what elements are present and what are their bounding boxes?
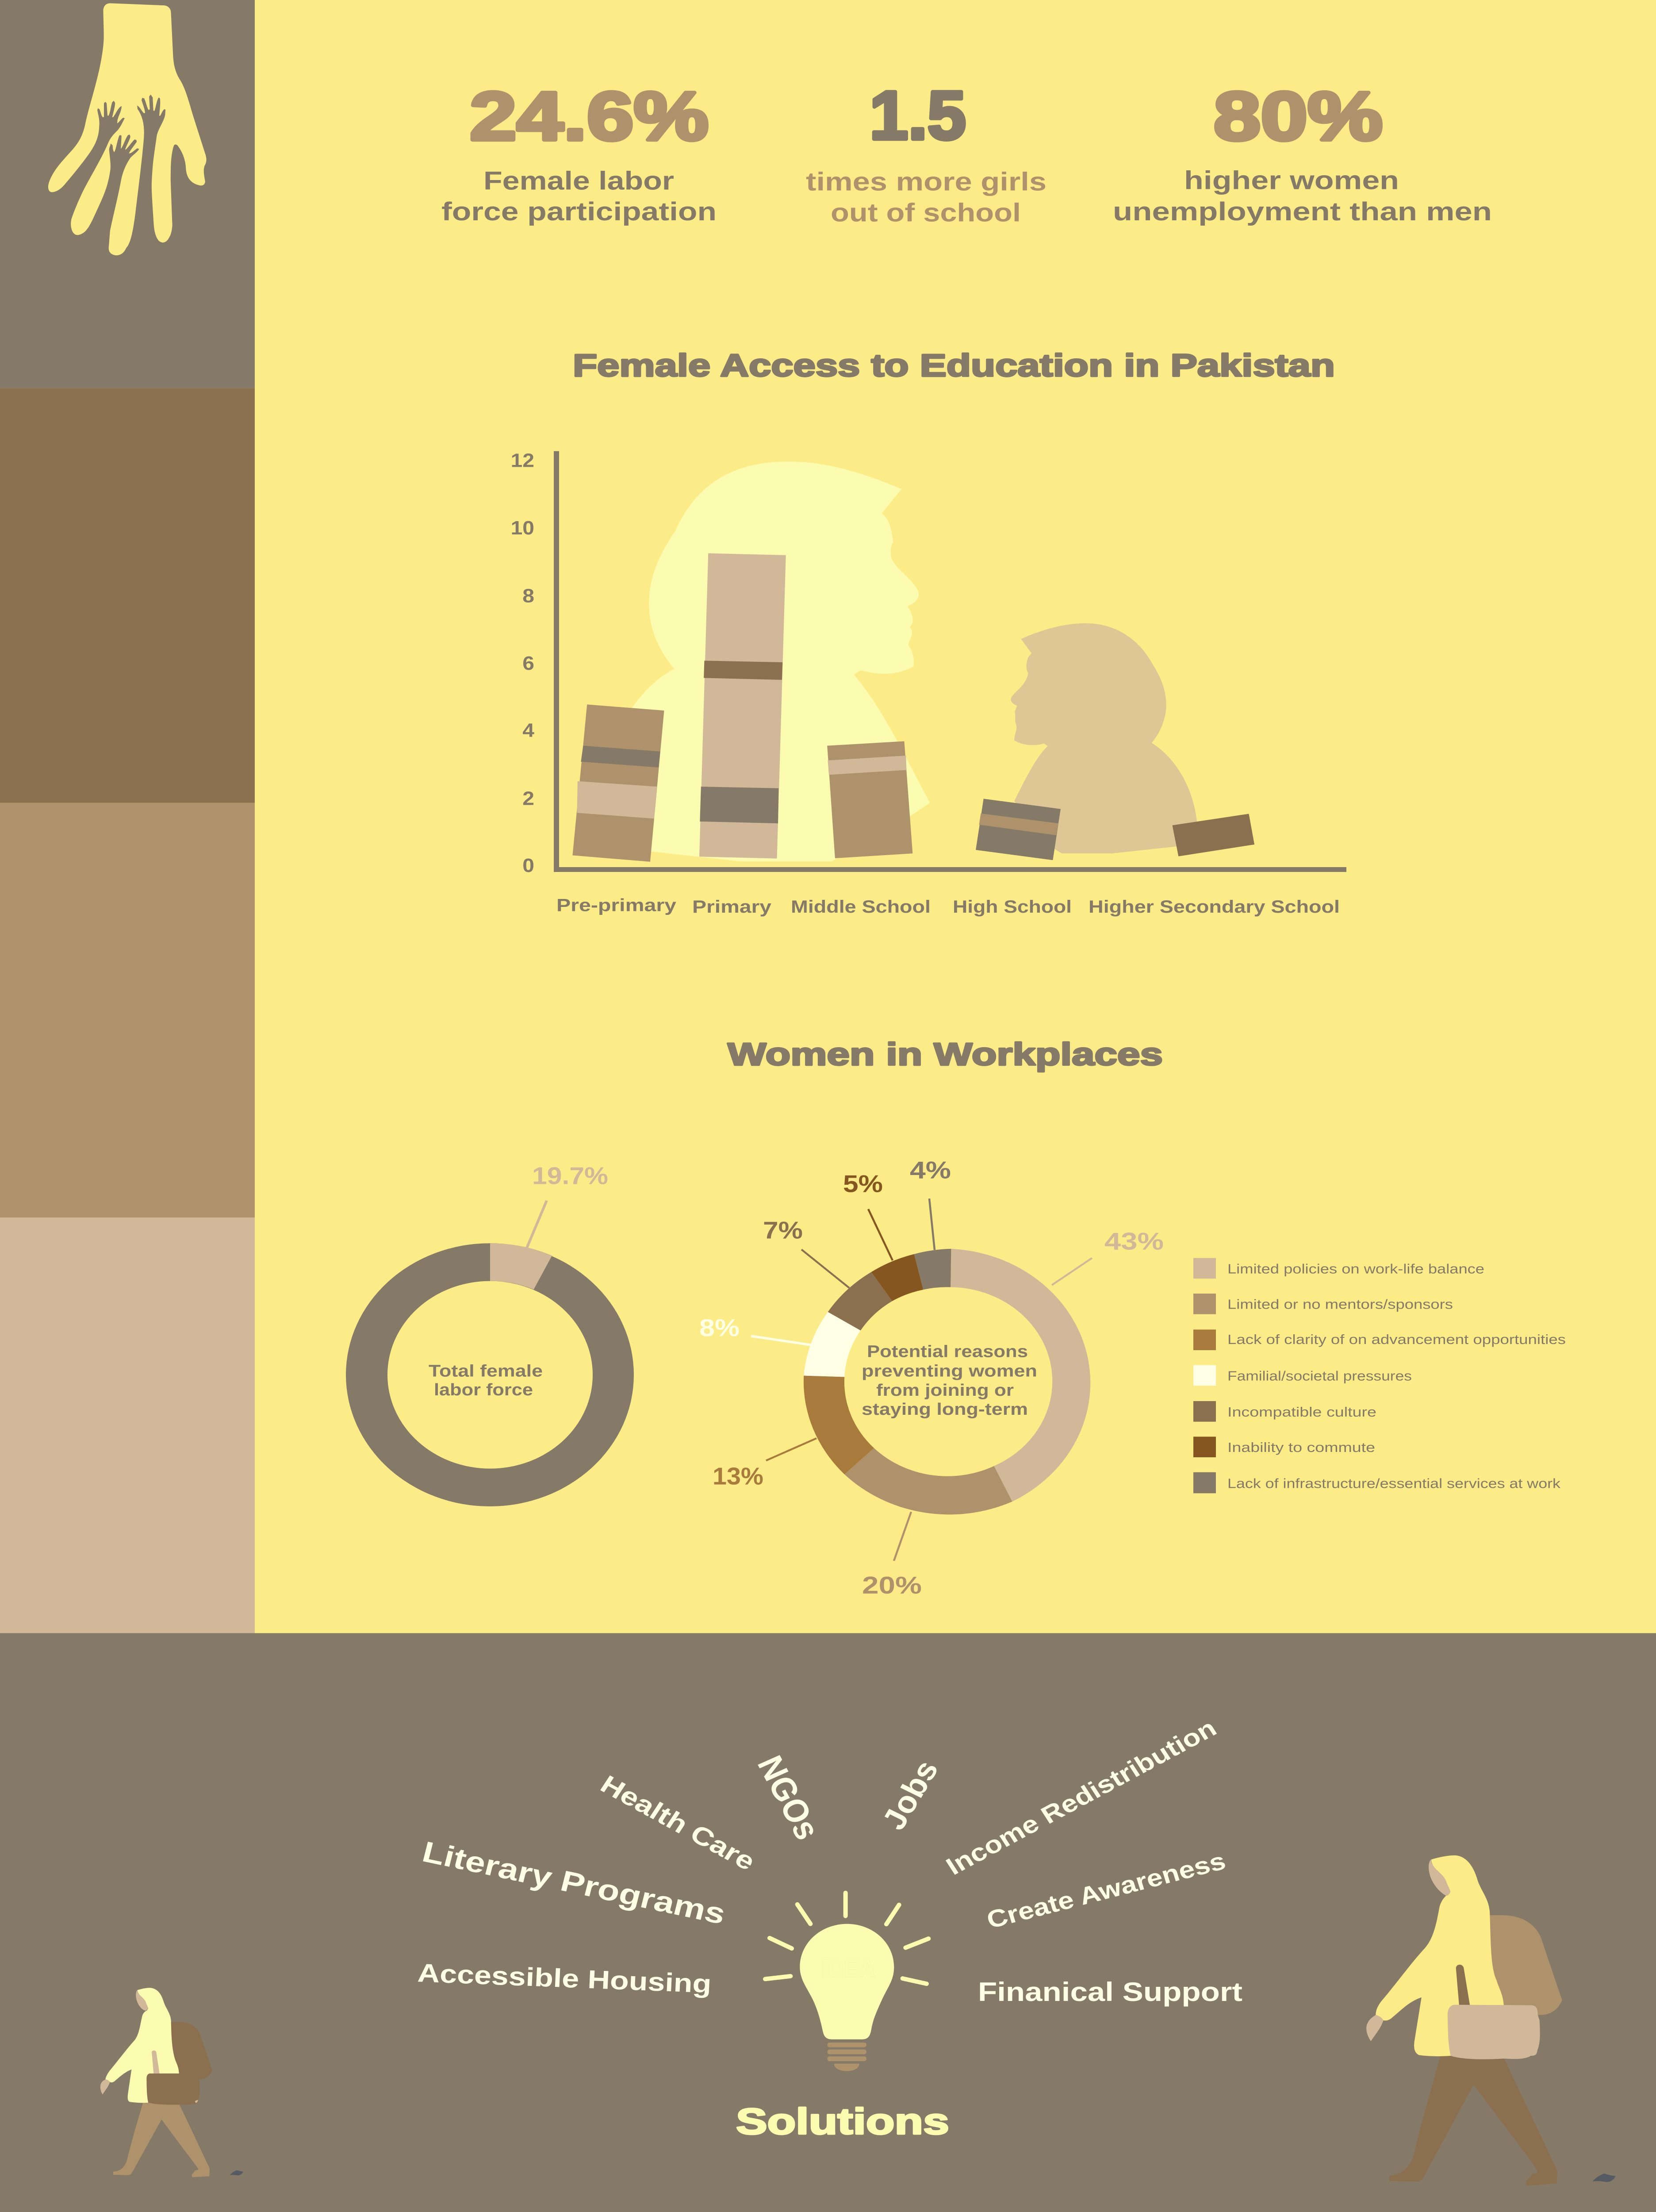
stat: 80% higher women unemployment: higher women <box>1184 166 1399 195</box>
illustration: large woman silhouette <box>598 461 930 861</box>
stat: 1.5 times more girls out of school: times more girls <box>806 167 1046 196</box>
center text: total female labor force <box>429 1361 543 1399</box>
donut slice: 19.7% <box>490 1244 552 1290</box>
y axis labels <box>511 449 534 876</box>
bar: High School <box>976 799 1061 860</box>
legend: potential reasons: Incompatible culture <box>1227 1404 1376 1419</box>
legend: potential reasons <box>1193 1258 1566 1493</box>
bulb screw base <box>828 2043 866 2071</box>
chart: potential reasons donut <box>699 1157 1164 1599</box>
x axis labels: Pre-primary <box>556 895 677 915</box>
heading: Solutions: Solutions <box>736 2101 949 2142</box>
bar: Higher Secondary School <box>1172 814 1254 856</box>
bar: Middle School <box>827 741 912 858</box>
bar: Pre-primary <box>572 704 664 862</box>
x axis labels: High School <box>953 897 1072 917</box>
illustration: small walking girl with backpack <box>100 1988 243 2177</box>
y axis labels: 8 <box>522 584 534 607</box>
bulb rays <box>765 1893 928 1984</box>
legend: potential reasons: Lack of infrastructure/essential services at work <box>1227 1476 1560 1491</box>
percentage labels: 7% <box>763 1217 803 1244</box>
x axis labels: Higher Secondary School <box>1089 897 1340 917</box>
x axis labels <box>556 895 1340 917</box>
stat: 1.5 times more girls out of school: out of school <box>831 198 1021 227</box>
stat: 1.5 times more girls out of school <box>806 77 1046 227</box>
legend: potential reasons: Lack of clarity of on advancement opportunities <box>1227 1332 1566 1347</box>
y axis labels: 0 <box>522 854 534 876</box>
icon: light bulb <box>765 1893 928 2071</box>
panel: solutions footer <box>0 1633 1656 2212</box>
y axis labels: 2 <box>522 787 534 809</box>
percentage labels: 8% <box>699 1314 740 1341</box>
stat: 1.5 times more girls out of school: 1.5 <box>870 77 966 154</box>
legend: potential reasons: Familial/societal pressures <box>1227 1368 1412 1383</box>
percentage labels: 13% <box>713 1463 763 1490</box>
center text: potential reasons: from joining or <box>876 1381 1014 1400</box>
chart: female access to education <box>511 449 1346 917</box>
percentage labels: 5% <box>843 1171 883 1198</box>
y axis labels: 12 <box>511 449 534 471</box>
donut segments <box>804 1249 1090 1514</box>
center text: potential reasons <box>862 1342 1037 1419</box>
stat: 24.6% female labor force participation: force participation <box>441 197 717 226</box>
solution words radiating from bulb: Jobs <box>875 1755 946 1835</box>
leader line: 19.7% <box>527 1201 547 1248</box>
percentage labels: 43% <box>1104 1228 1164 1255</box>
legend: potential reasons: Limited policies on work-life balance <box>1227 1261 1484 1276</box>
illustration: small girl silhouette <box>1011 623 1197 853</box>
solution words radiating from bulb <box>417 1714 1242 2007</box>
solution words radiating from bulb: Health Care <box>595 1770 761 1876</box>
percentage labels: 4% <box>910 1157 951 1184</box>
stat: 80% higher women unemployment: unemployment than men <box>1113 197 1492 226</box>
x axis labels: Primary <box>692 897 772 917</box>
solution words radiating from bulb: NGOs <box>750 1750 827 1845</box>
label: 19.7%: 19.7% <box>532 1163 608 1190</box>
solution words radiating from bulb: Accessible Housing <box>417 1959 712 1998</box>
center text: potential reasons: Potential reasons <box>867 1342 1028 1361</box>
solution words radiating from bulb: Literary Programs <box>419 1835 729 1931</box>
percentage labels <box>699 1157 1164 1599</box>
panel: headline statistics <box>441 77 1492 227</box>
bulb glass <box>800 1924 894 2039</box>
legend: potential reasons: Limited or no mentors/sponsors <box>1227 1297 1453 1312</box>
solution words radiating from bulb: Income Redistribution <box>941 1714 1222 1880</box>
panel: left colour sidebar <box>0 0 255 1633</box>
stat: 24.6% female labor force participation: Female labor <box>483 166 674 195</box>
stat: 24.6% female labor force participation: 24.6% <box>470 78 709 155</box>
leader lines <box>751 1198 1092 1561</box>
illustration: large walking woman with backpack <box>1366 1855 1615 2186</box>
solution words radiating from bulb: Create Awareness <box>984 1847 1229 1934</box>
heading: Women in Workplaces: Women in Workplaces <box>728 1037 1163 1072</box>
solution words radiating from bulb: Finanical Support <box>978 1978 1242 2007</box>
x axis labels: Middle School <box>791 897 931 917</box>
stat: 24.6% female labor force participation <box>441 78 717 226</box>
stat: 80% higher women unemployment <box>1113 78 1492 226</box>
chart axes <box>554 451 1346 872</box>
legend: potential reasons: Inability to commute <box>1227 1440 1375 1455</box>
y axis labels: 6 <box>522 652 534 674</box>
heading: Female Access to Education in Pakistan: Female Access to Education in Pakistan <box>573 348 1335 383</box>
icon: large hand with three small reaching hands <box>48 3 207 255</box>
y axis labels: 4 <box>522 719 534 741</box>
bar: Primary <box>699 553 786 859</box>
center text: total female labor force: Total female <box>429 1361 543 1380</box>
center text: total female labor force: labor force <box>434 1380 533 1399</box>
center text: potential reasons: preventing women <box>862 1361 1037 1380</box>
stat: 80% higher women unemployment: 80% <box>1214 78 1383 155</box>
percentage labels: 20% <box>862 1572 922 1599</box>
y axis labels: 10 <box>511 517 534 539</box>
bulb lettering: IDEA: IDEA <box>821 1954 876 1983</box>
chart: total female labor force donut <box>346 1163 634 1506</box>
center text: potential reasons: staying long-term <box>862 1400 1028 1419</box>
